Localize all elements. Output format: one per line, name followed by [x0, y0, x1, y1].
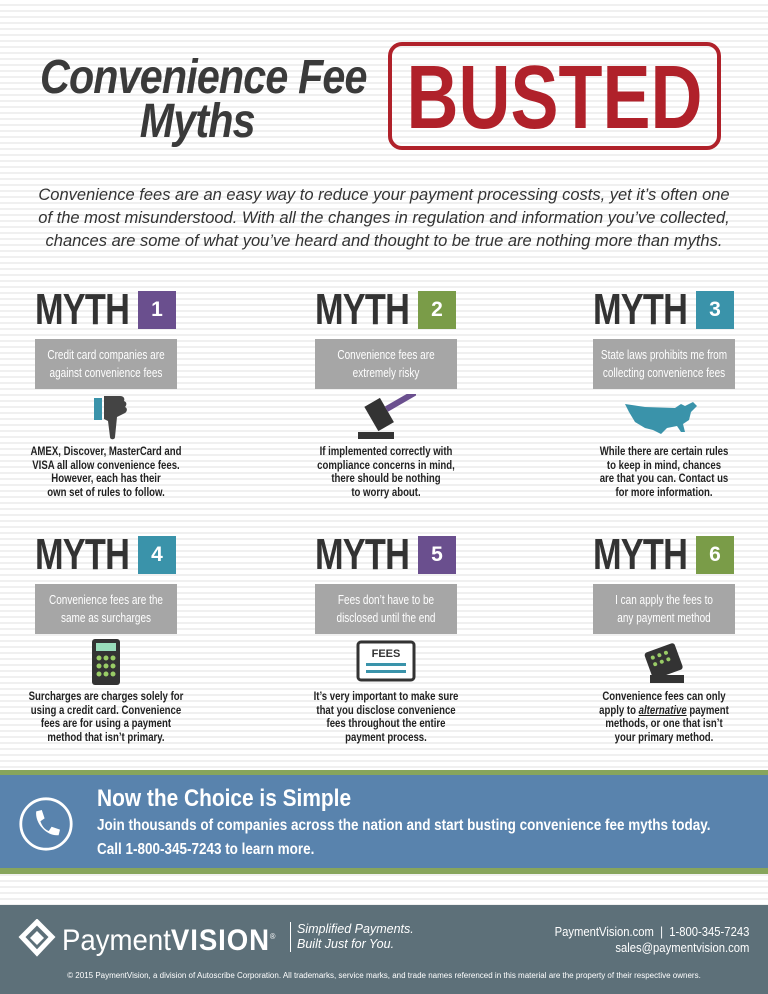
myth 1: own set of rules to follow. [47, 484, 165, 498]
myth 6: your primary method. [615, 730, 713, 744]
myth 1: Credit card companies are [47, 348, 165, 362]
myth 5 [314, 530, 458, 744]
myth 6: MYTH [593, 530, 687, 579]
myth 5: MYTH [315, 530, 409, 579]
myth 5: 5 [431, 543, 443, 566]
myth 4: MYTH [35, 530, 129, 579]
title [40, 51, 367, 148]
footer [0, 905, 768, 994]
myth 2: there should be nothing [331, 471, 441, 485]
myth 1: MYTH [35, 285, 129, 334]
myth 5: Fees don’t have to be [338, 593, 434, 607]
banner text: Join thousands of companies across the nation and start busting convenience fee myths today. [97, 817, 710, 834]
myth 2: to worry about. [351, 484, 421, 498]
intro text [38, 186, 730, 250]
icon: register [644, 643, 684, 683]
icon: thumbs down [94, 396, 127, 440]
myth 1: 1 [151, 298, 163, 321]
contact [554, 925, 749, 955]
icon: usa map [625, 402, 697, 434]
myth 5: that you disclose convenience [316, 702, 456, 716]
banner text [97, 785, 710, 858]
title: Convenience Fee [40, 51, 367, 104]
intro text: chances are some of what you’ve heard and thought to be true are nothing more than myths. [46, 232, 722, 250]
myth 3: MYTH [593, 285, 687, 334]
icon: phone [19, 797, 73, 851]
myth 2: compliance concerns in mind, [317, 458, 455, 472]
logo: Built Just for You. [297, 937, 394, 951]
banner text: Now the Choice is Simple [97, 785, 351, 812]
myth 4: using a credit card. Convenience [31, 702, 181, 716]
icon: fees sheet: FEES [372, 648, 400, 660]
myth 3: collecting convenience fees [603, 366, 725, 380]
myth 1: against convenience fees [50, 366, 162, 380]
intro text: Convenience fees are an easy way to reduce your payment processing costs, yet it’s often one [38, 186, 730, 204]
myth 2 [315, 285, 457, 498]
contact: PaymentVision.com | 1-800-345-7243 [554, 925, 749, 939]
myth 3: are that you can. Contact us [600, 471, 728, 485]
myth 4: Convenience fees are the [49, 593, 163, 607]
myth 6: apply to alternative payment [599, 702, 729, 716]
myth 5: fees throughout the entire [327, 716, 445, 730]
myth 2: If implemented correctly with [320, 444, 452, 458]
myth 5: It’s very important to make sure [314, 689, 458, 703]
myth 3: State laws prohibits me from [601, 348, 727, 362]
myth 6 [593, 530, 735, 744]
myth 2: MYTH [315, 285, 409, 334]
myth 5: payment process. [345, 730, 427, 744]
myth 5: disclosed until the end [337, 611, 435, 625]
myth 3: 3 [709, 298, 721, 321]
myth 6: I can apply the fees to [615, 593, 713, 607]
myth 4: Surcharges are charges solely for [29, 689, 183, 703]
myth 6: methods, or one that isn’t [605, 716, 723, 730]
myth 4: 4 [151, 543, 163, 566]
myth 1: However, each has their [51, 471, 161, 485]
contact: sales@paymentvision.com [615, 941, 749, 955]
myth 6: any payment method [617, 611, 711, 625]
myth 1: AMEX, Discover, MasterCard and [30, 444, 181, 458]
myth 4: method that isn’t primary. [47, 730, 165, 744]
logo: PaymentVISION® [62, 924, 275, 957]
myth 3: to keep in mind, chances [607, 458, 721, 472]
myth 3: for more information. [615, 484, 713, 498]
myth 3 [593, 285, 735, 498]
banner text: Call 1-800-345-7243 to learn more. [97, 841, 314, 858]
myth 2: 2 [431, 298, 443, 321]
title: Myths [140, 95, 255, 148]
myth 4 [28, 530, 184, 744]
copyright: © 2015 PaymentVision, a division of Autoscribe Corporation. All trademarks, service marks, and trade names referenced in this material are the property of their respective owners. [67, 971, 701, 980]
myth 6: Convenience fees can only [602, 689, 726, 703]
icon: gavel [358, 394, 416, 439]
myth 1 [30, 285, 181, 498]
logo: Simplified Payments. [297, 922, 414, 936]
myth 6: 6 [709, 543, 721, 566]
intro text: of the most misunderstood. With all the changes in regulation and information you’ve collected, [38, 209, 730, 227]
myth 4: same as surcharges [61, 611, 151, 625]
busted stamp: BUSTED [406, 48, 703, 148]
myth 2: Convenience fees are [337, 348, 435, 362]
icon: calculator [92, 639, 120, 685]
icon: fees sheet [356, 640, 416, 682]
myth 4: fees are for using a payment [41, 716, 171, 730]
logo [18, 919, 414, 957]
myth 1: VISA all allow convenience fees. [32, 458, 180, 472]
myth 2: extremely risky [353, 366, 419, 380]
myth 3: While there are certain rules [600, 444, 728, 458]
banner [0, 770, 768, 874]
